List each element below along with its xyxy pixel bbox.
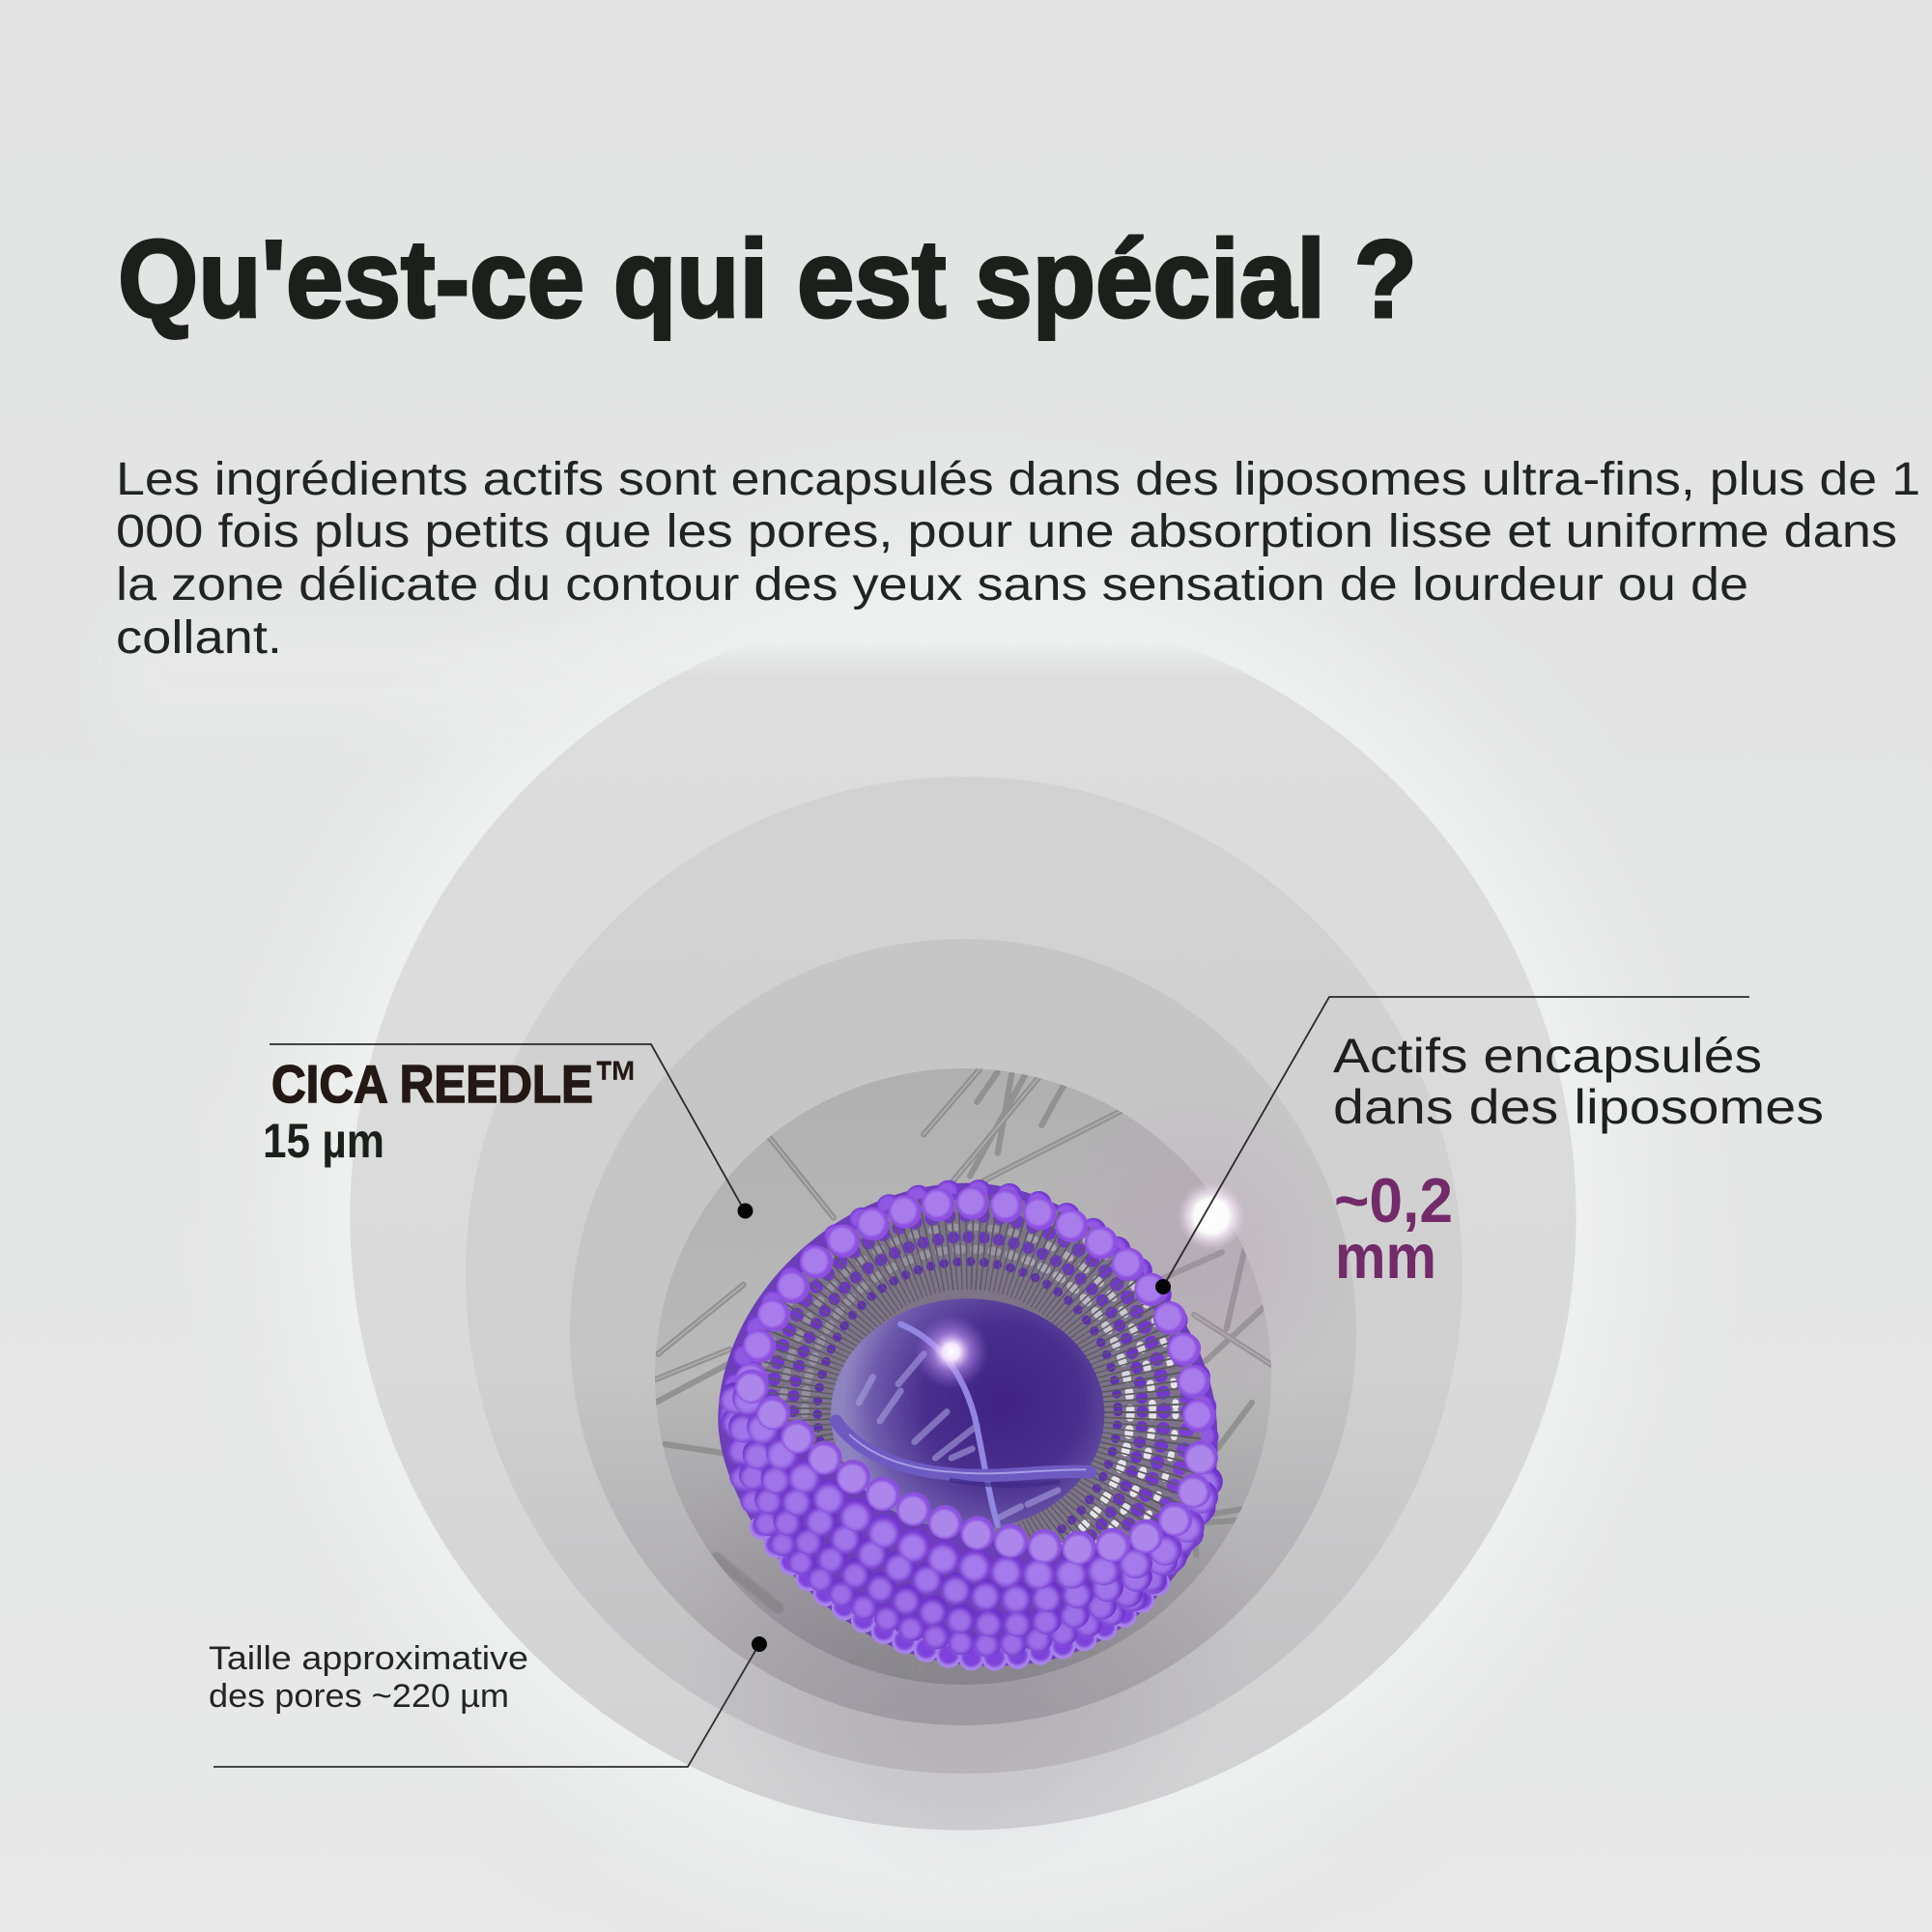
DNA strand one: [900, 1324, 998, 1525]
circle: outer: [350, 604, 1577, 1831]
label: CICA REEDLE: CICA REEDLE: [271, 1054, 593, 1114]
DNA rungs: [859, 1354, 1058, 1519]
top rim of heads: [751, 1202, 1200, 1439]
label: CICA REEDLE: ™: [594, 1049, 639, 1116]
nucleus sphere: [831, 1298, 1104, 1530]
label: pores: des pores ~220 µm: [209, 1678, 509, 1715]
circle: second: [466, 777, 1463, 1774]
circle: fourth: [655, 1068, 1271, 1685]
soft shadow under liposome: [676, 1304, 1256, 1884]
value: ~0,2 mm: ~0,2: [1334, 1165, 1453, 1236]
callout: pore size: [209, 1636, 767, 1767]
icon: white light flare: [1177, 1181, 1246, 1251]
label: actifs encapsulés: dans des liposomes: [1333, 1080, 1824, 1134]
liposome interior with radial lipid tails: [754, 1194, 1202, 1548]
leader dot: pores: [752, 1636, 767, 1652]
intro paragraph: Les ingrédients actifs sont encapsulés dans des liposomes ultra-fins, plus de 1: [116, 454, 1920, 505]
front rim of heads: [751, 1386, 1202, 1549]
intro paragraph: collant.: [116, 612, 282, 664]
value: ~0,2 mm: mm: [1335, 1221, 1436, 1292]
leader dot: actifs: [1155, 1279, 1171, 1294]
callout: CICA REEDLE: [263, 1044, 753, 1219]
row 4 of heads: [735, 1421, 1204, 1625]
DNA spark: [915, 1315, 988, 1389]
DNA strand two: [836, 1421, 1090, 1475]
illustration: needles inside pore circle: [656, 1069, 1273, 1685]
leader dot: CICA REEDLE: [738, 1204, 753, 1219]
intro paragraph: la zone délicate du contour des yeux sans sensation de lourdeur ou de: [116, 559, 1748, 611]
leader line: actifs: [1163, 997, 1749, 1287]
concentric scale circles: [350, 604, 1577, 1884]
intro paragraph: 000 fois plus petits que les pores, pour une absorption lisse et uniforme dans: [116, 506, 1897, 557]
intro paragraph: [116, 454, 1920, 664]
glow: pinkish light behind liposome: [1152, 1174, 1271, 1323]
label: actifs encapsulés: [1333, 1029, 1824, 1134]
illustration: liposome sphere: [718, 1176, 1229, 1666]
row 3 of heads: [734, 1398, 1208, 1600]
label: pores: Taille approximative: [209, 1640, 528, 1677]
label: actifs encapsulés: Actifs encapsulés: [1333, 1029, 1762, 1083]
circle: third: [570, 939, 1356, 1725]
row 6 of heads: [762, 1526, 1166, 1659]
value: ~0,2 mm: [1334, 1165, 1453, 1292]
title: Qu'est-ce qui est spécial ?: [118, 218, 1417, 341]
value: 15 µm: 15 µm: [263, 1114, 384, 1168]
label: pores: [209, 1640, 528, 1715]
row 2 of heads: [748, 1398, 1206, 1575]
DNA helix: [836, 1315, 1090, 1525]
back outer row of phospholipid heads: [730, 1191, 1206, 1444]
row 5 of heads: [742, 1476, 1189, 1645]
liposome base body: [718, 1183, 1217, 1666]
leader line: CICA REEDLE: [270, 1044, 745, 1211]
callout: actifs encapsulés: [1155, 997, 1824, 1294]
leader line: pores: [213, 1644, 759, 1767]
